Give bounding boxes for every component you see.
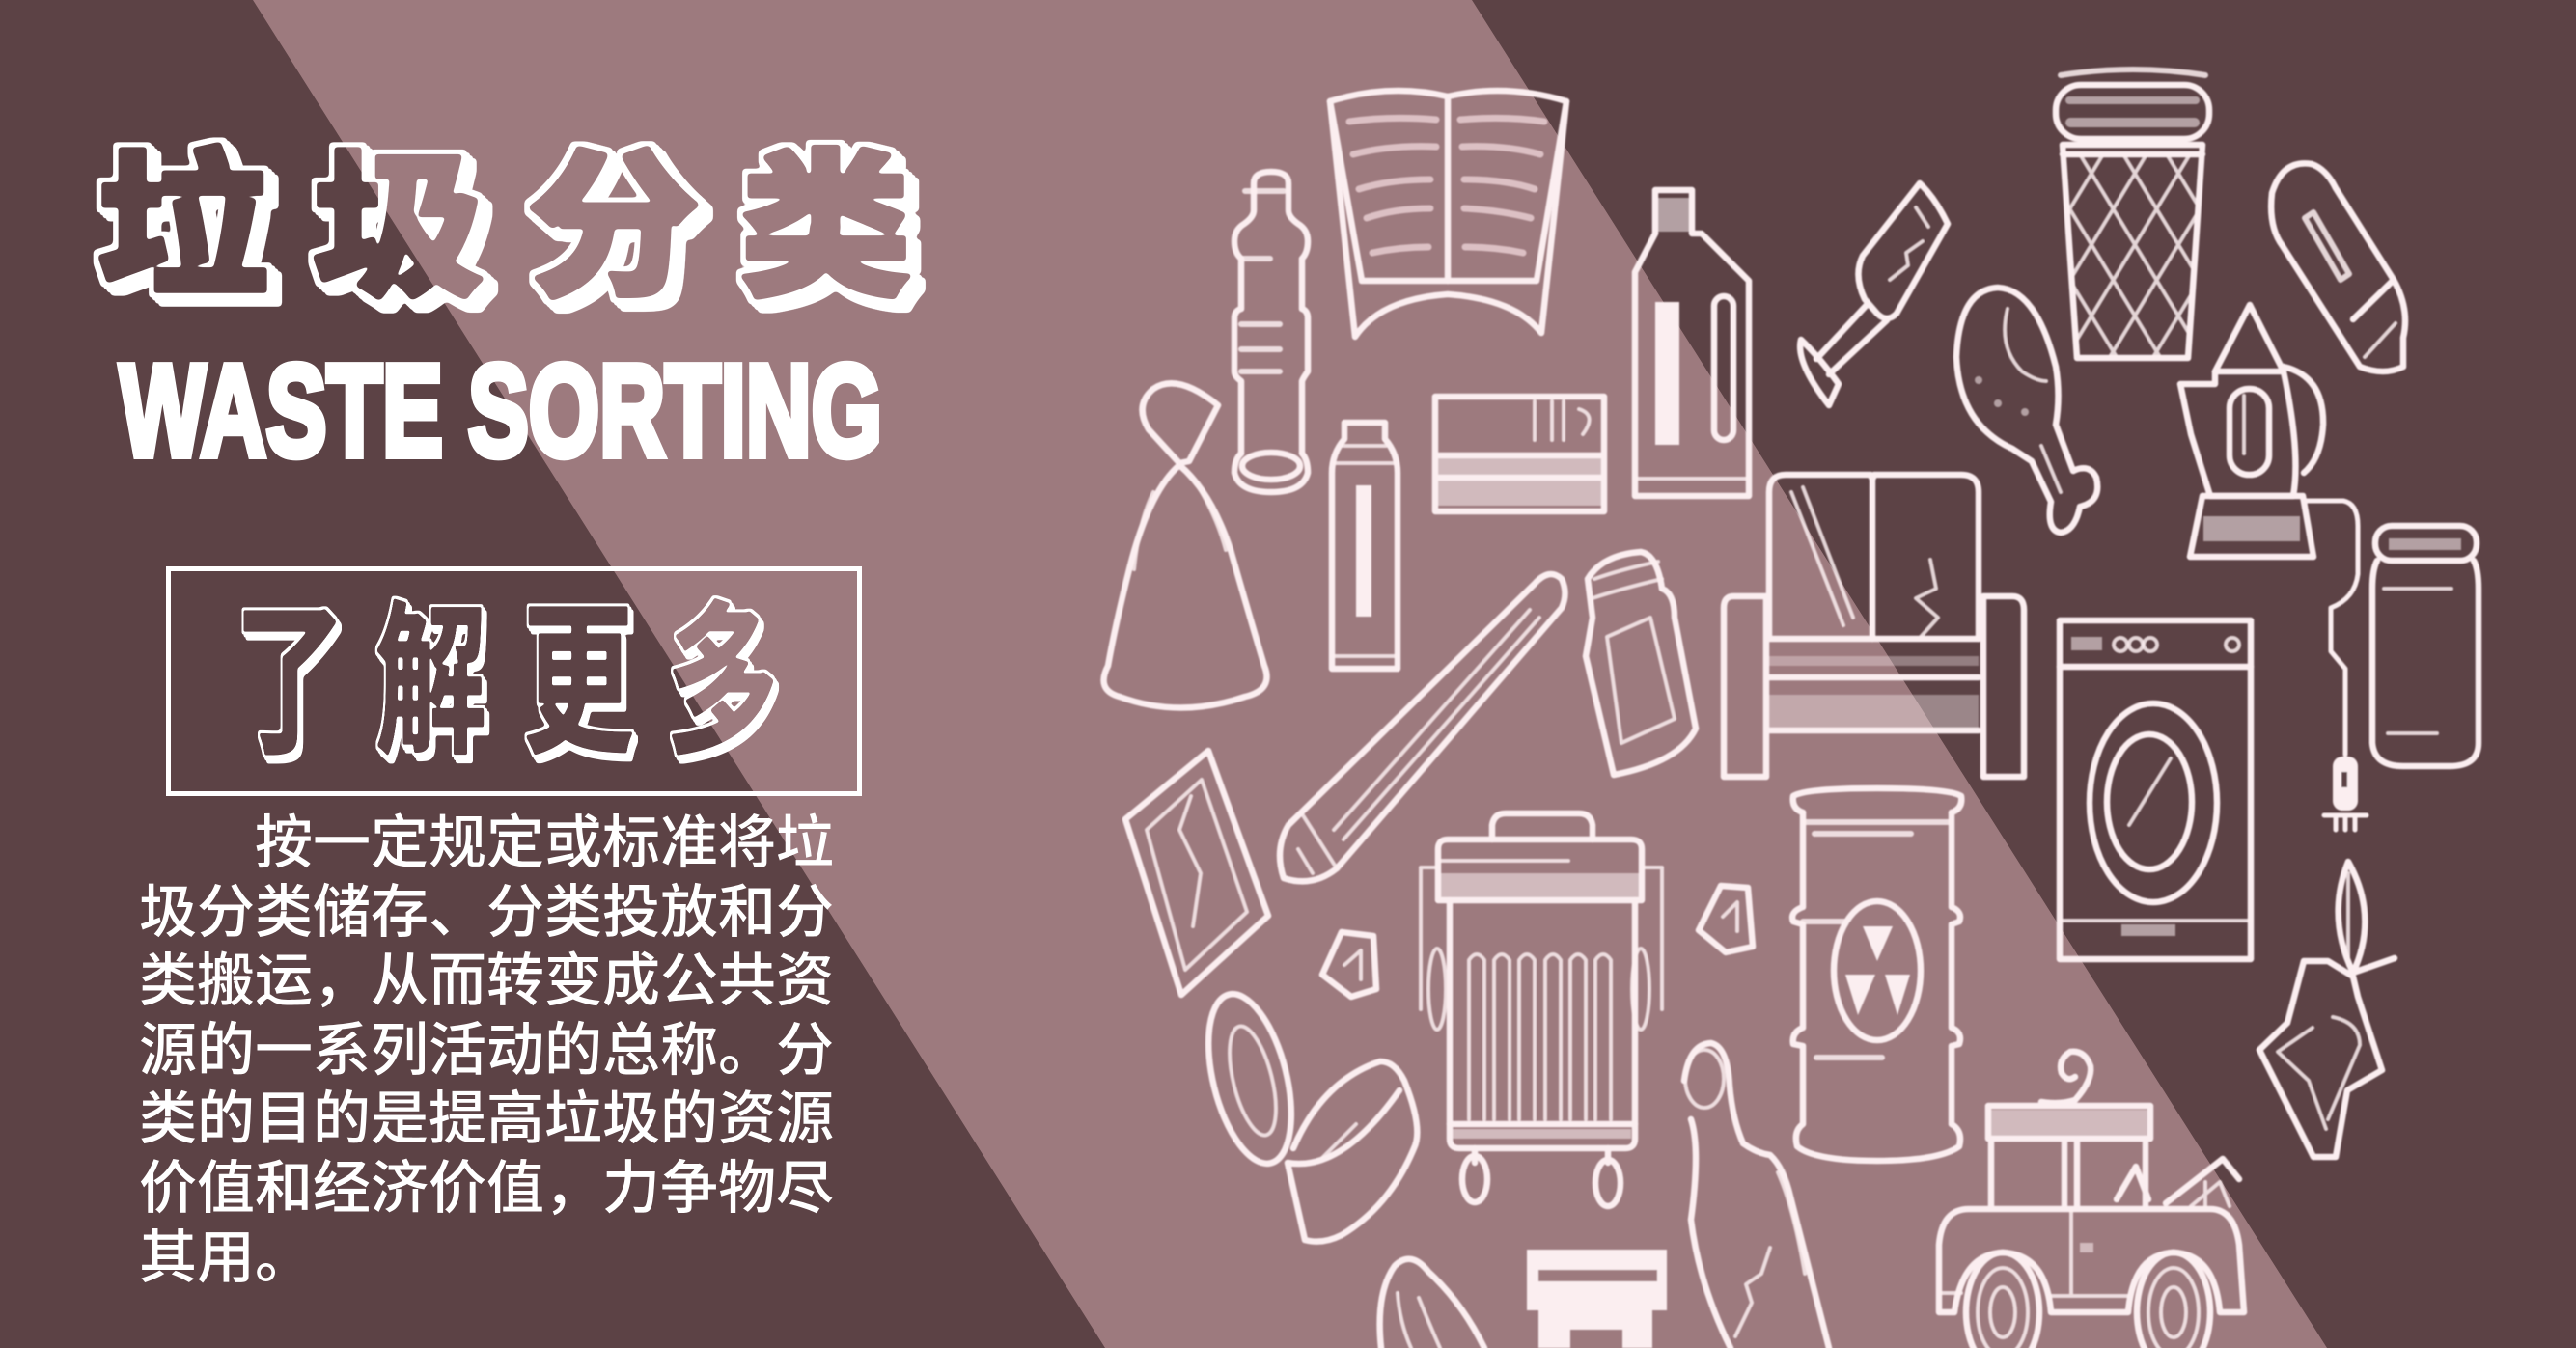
icon: open book (1330, 91, 1566, 337)
icon: electric kettle with cord and plug (2180, 305, 2367, 830)
icon: bowl cut by bottom edge (1380, 1259, 1484, 1348)
icon: chicken leg (1956, 288, 2097, 533)
icon: fluorescent tube (1280, 574, 1565, 881)
text block: description paragraph: 其用。 (139, 1225, 313, 1290)
icon: small container (1332, 423, 1398, 669)
icon: small paper scrap left (1322, 932, 1376, 997)
icon: white stacked crate (1527, 1250, 1667, 1348)
title: English heading: WASTE SORTING (120, 338, 882, 483)
text block: description paragraph: 类的目的是提高垃圾的资源 (139, 1087, 834, 1151)
text block: description paragraph: 按一定规定或标准将垃 (255, 811, 834, 875)
icon: glass jar (2372, 526, 2479, 766)
button text: 了解更多 (234, 591, 778, 774)
text block: description paragraph (139, 811, 834, 1290)
icon: plastic bottle (1234, 172, 1308, 492)
button frame: learn more (168, 569, 859, 793)
icon: spice jar (1586, 552, 1696, 775)
icon: apple core with leaf (2259, 862, 2395, 1157)
icon: broken wine glass (1800, 183, 1948, 405)
icon: cracked tablet (1125, 751, 1268, 995)
icon: mesh waste basket (1950, 69, 2320, 358)
icon: food can with open lid (1193, 985, 1417, 1242)
text block: description paragraph: 类搬运，从而转变成公共资 (139, 949, 834, 1013)
text block: description paragraph: 价值和经济价值，力争物尽 (139, 1156, 834, 1221)
icon: discarded tube container (2271, 163, 2405, 371)
icon: small paper scrap right (1699, 886, 1753, 952)
icon: radioactive barrel (1792, 788, 1961, 1161)
icon: detergent bottle (1635, 190, 1749, 496)
text block: description paragraph: 圾分类储存、分类投放和分 (139, 880, 834, 945)
icon: washing machine (2060, 620, 2251, 959)
icons: waste item illustrations (1104, 69, 2479, 1348)
icon: tied garbage bag (1104, 383, 1266, 708)
icon: broken glass bottle (1684, 1043, 1829, 1348)
text block: description paragraph: 源的一系列活动的总称。分 (139, 1018, 834, 1083)
icon: old car (1939, 1052, 2244, 1348)
title: Chinese heading: 垃圾分类 (97, 139, 912, 316)
icon: wheeled trash bin (1421, 813, 1662, 1206)
icon: stacked box (1435, 397, 1604, 511)
icon: worn sofa (1724, 475, 2024, 777)
